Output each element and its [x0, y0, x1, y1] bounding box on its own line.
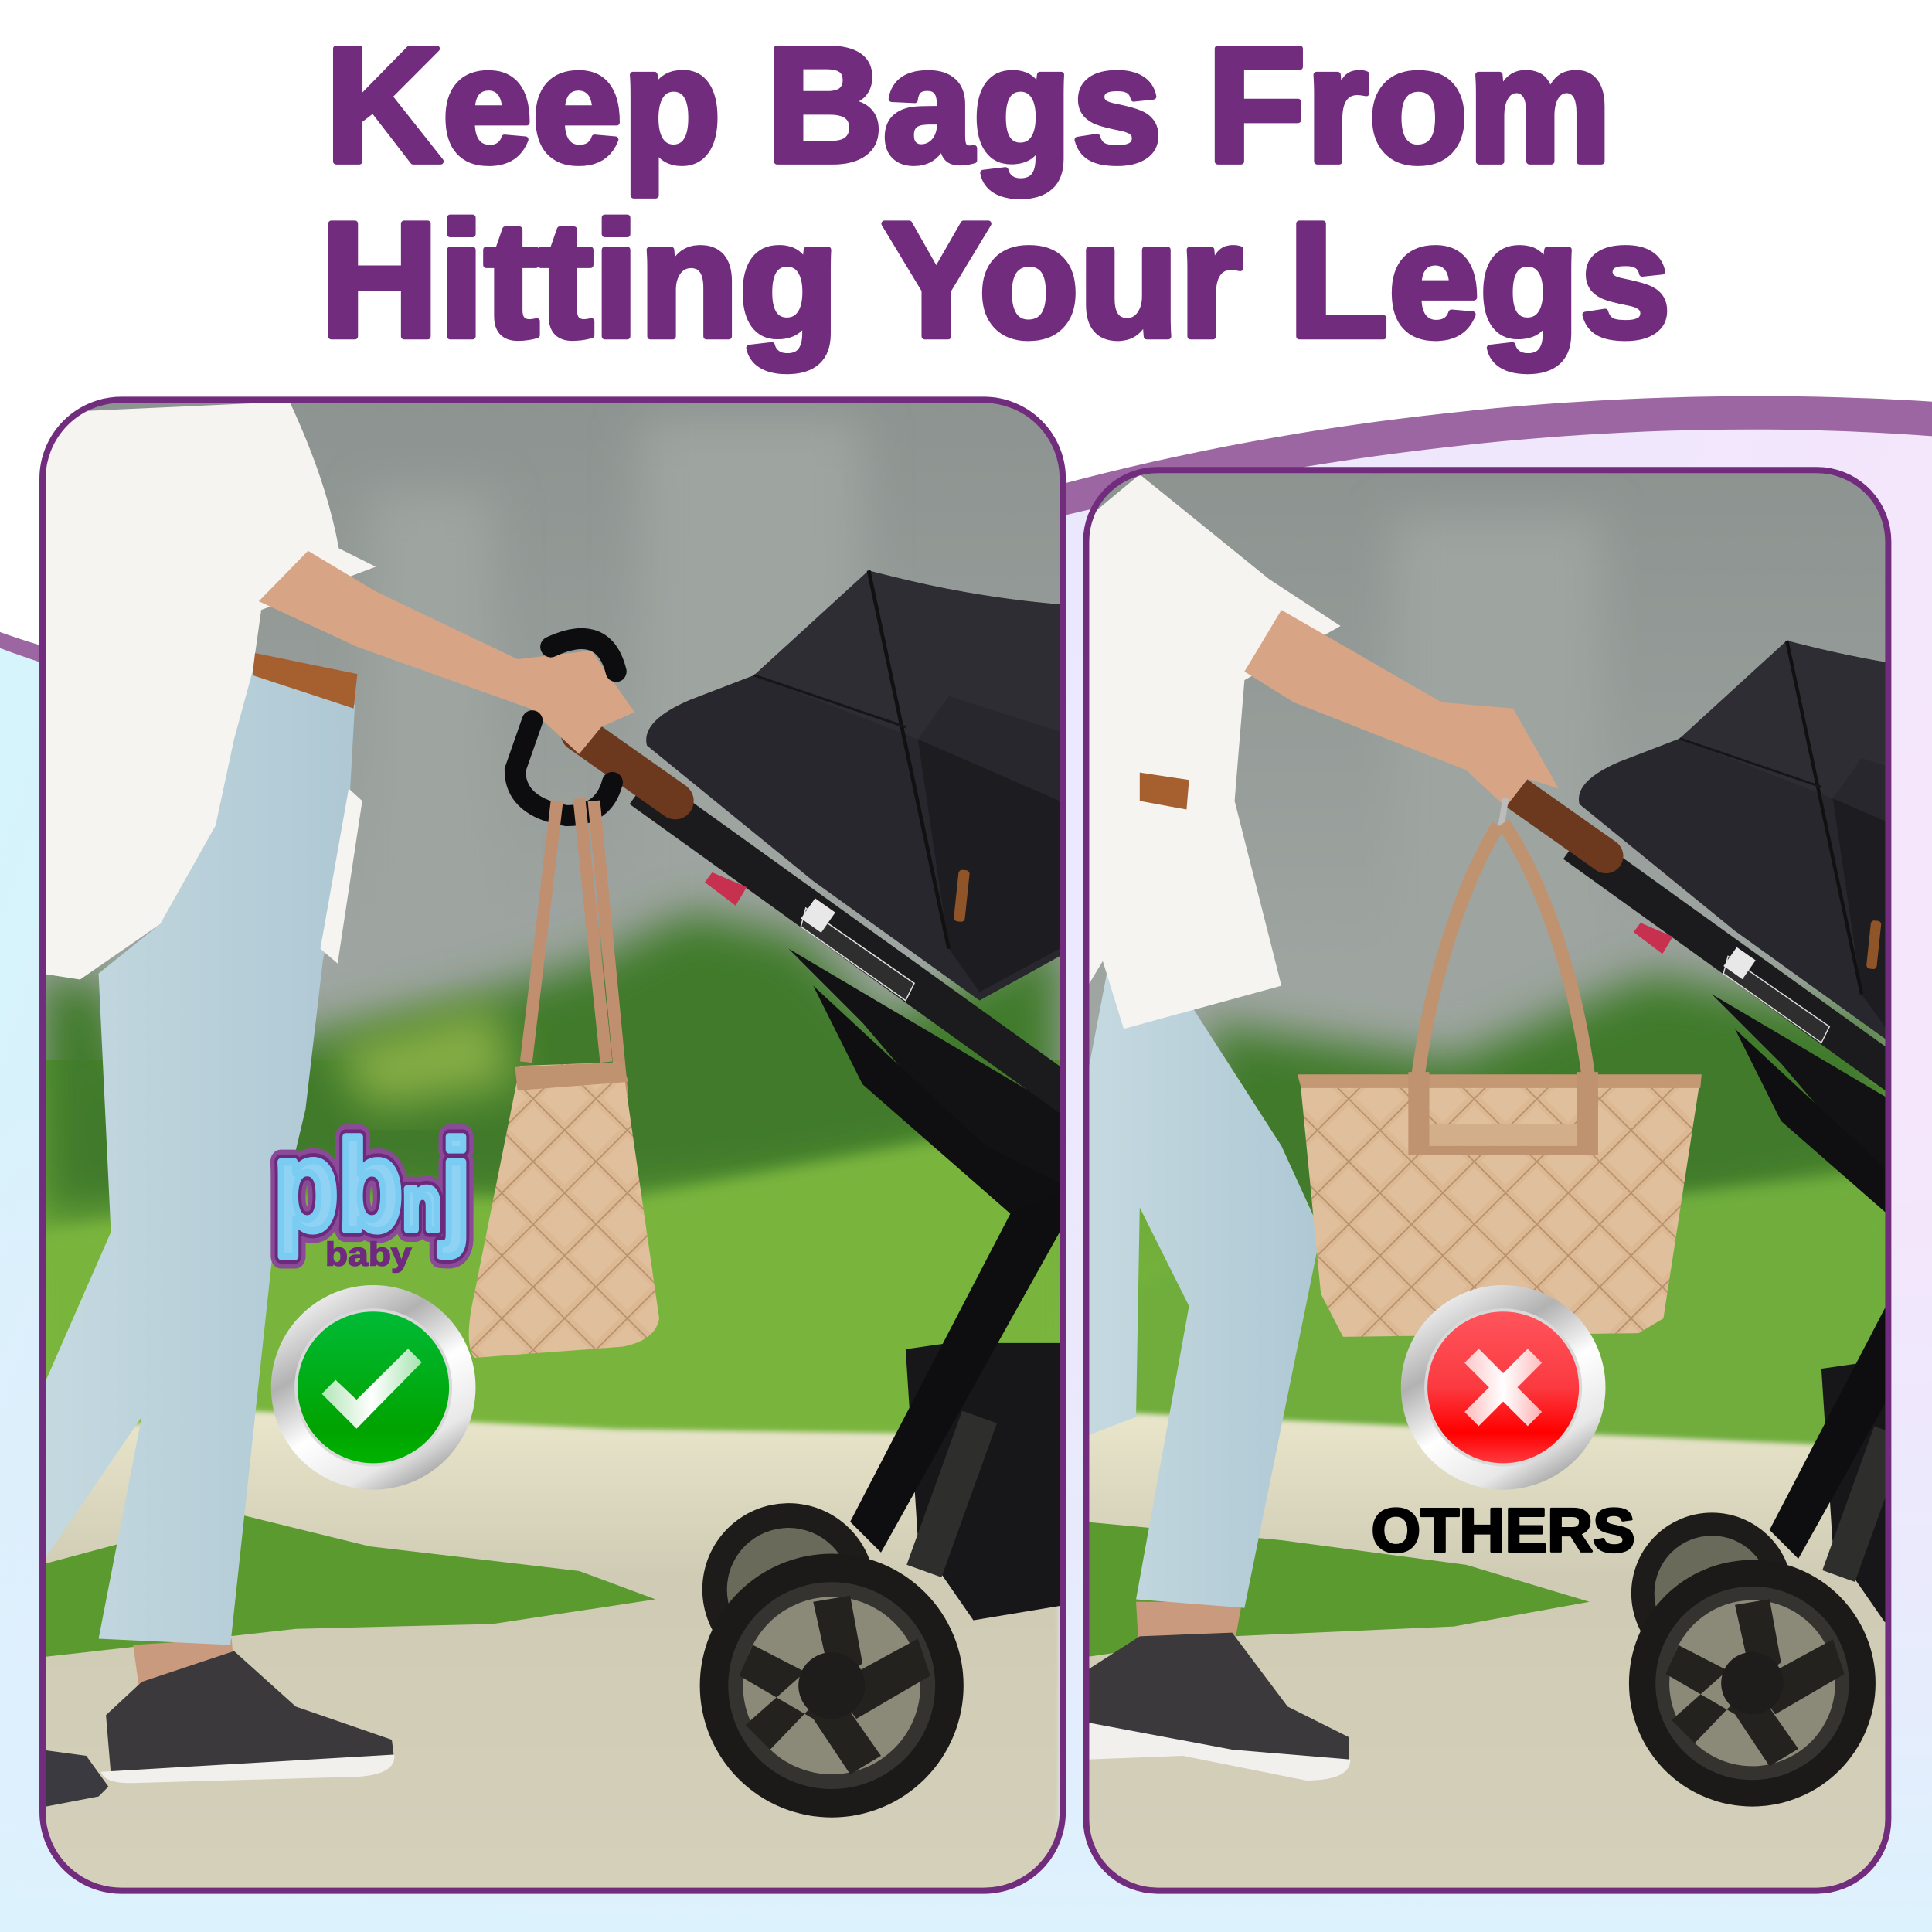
title: Keep Bags From: [325, 13, 1611, 196]
pbnj baby logo: [274, 1114, 471, 1273]
panel border: left: [43, 400, 1063, 1891]
concrete wall background: [41, 398, 1063, 1063]
wordmark pbnj: pbnj: [274, 1114, 471, 1257]
person: shoe and foot: [1088, 1602, 1350, 1781]
stroller: [1516, 641, 1932, 1807]
title: [321, 13, 1671, 371]
hedge and lawn: [1084, 974, 1890, 1454]
carabiner hook: [515, 638, 616, 815]
grass patch: [1084, 1522, 1590, 1657]
gravel path: [41, 1411, 1060, 1893]
person: shirt: [1088, 474, 1341, 1029]
person: jeans: [41, 672, 355, 1645]
title: Hitting Your Legs: [321, 188, 1671, 371]
hedge and lawn: [41, 912, 1063, 1441]
person: jeans: [1088, 801, 1321, 1608]
icon: red cross badge: [1401, 1285, 1605, 1490]
handbag: hung from hook: [469, 798, 659, 1358]
person: arm and hand: [1244, 610, 1559, 807]
person: left shoe and foot: [41, 1639, 394, 1808]
panel border: right: [1086, 470, 1888, 1891]
wordmark pbnj: pbnj: [274, 1114, 471, 1257]
person: belt: [253, 653, 357, 709]
purple swoosh: [0, 396, 1932, 701]
concrete wall background: [1084, 468, 1890, 1084]
person: shirt: [41, 402, 376, 980]
panel: others product photo: [1084, 468, 1932, 1893]
person: belt: [1140, 773, 1189, 810]
icon: green check badge: [271, 1285, 475, 1490]
wordmark pbnj: pbnj: [274, 1114, 471, 1257]
stroller: [561, 570, 1060, 1818]
label: OTHERS: OTHERS: [1372, 1495, 1635, 1564]
gravel path: [1084, 1411, 1890, 1893]
grass patch: [41, 1513, 655, 1657]
person: arm and hand: [259, 551, 634, 754]
panel: pbnj baby product photo: [46, 403, 1060, 1888]
small hook: [1501, 798, 1505, 828]
wordmark baby: baby: [325, 1236, 412, 1273]
handbag: wide tote: [1298, 823, 1702, 1337]
